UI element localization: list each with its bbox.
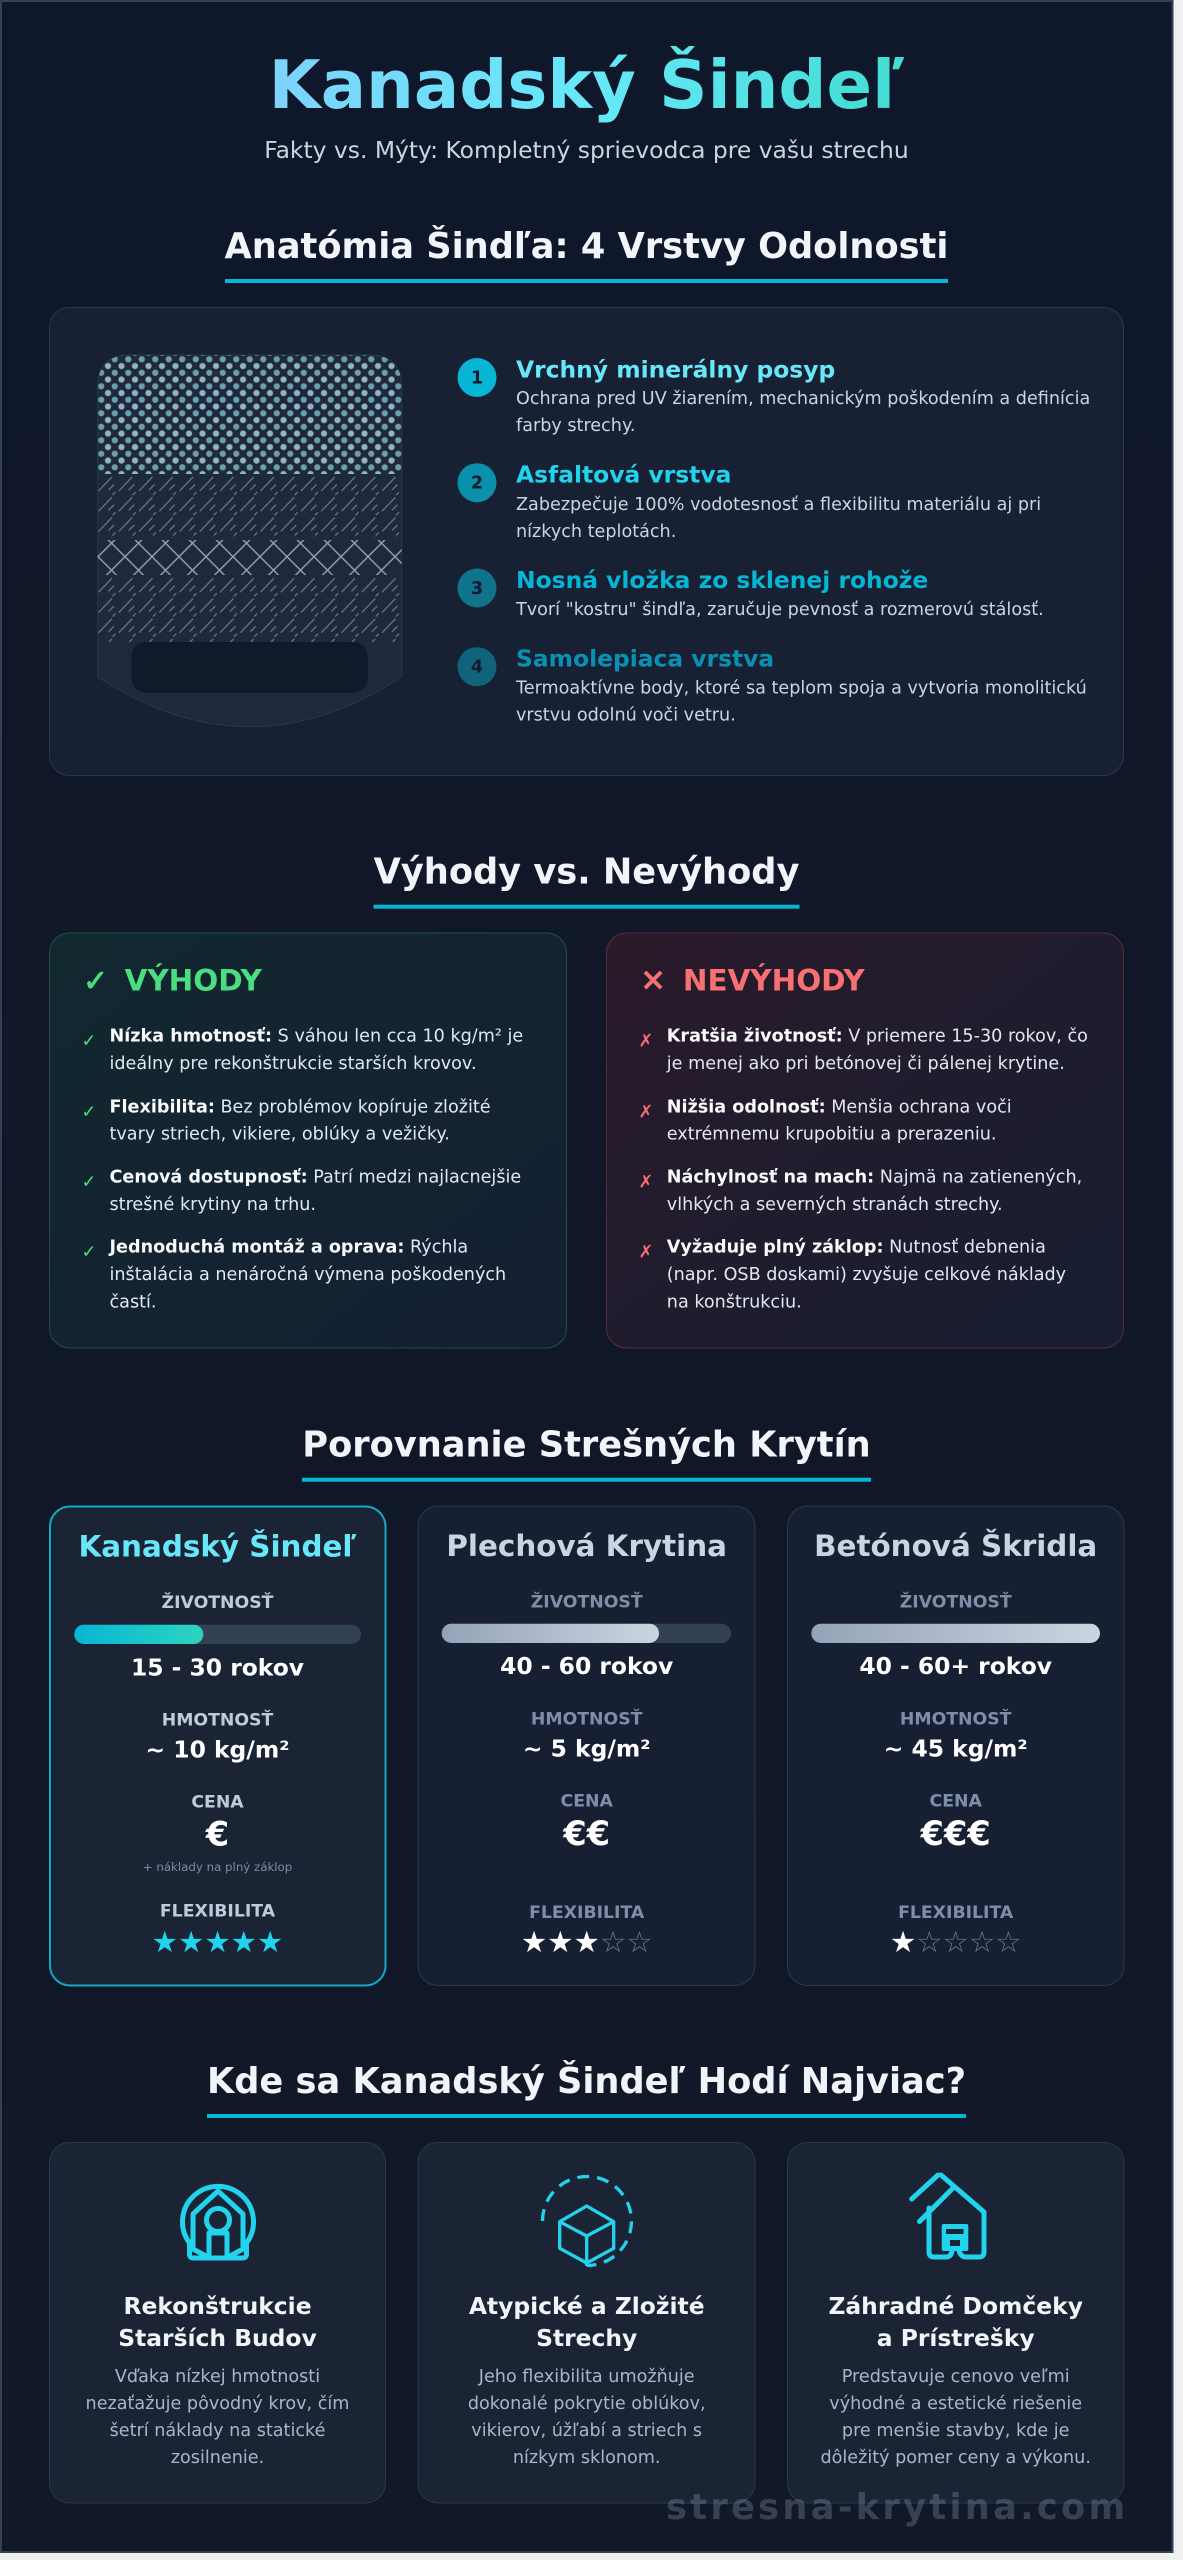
comparison card: Betónová Škridla — [788, 1506, 1124, 1986]
comparison card: Kanadský Šindeľ: FLEXIBILITA — [160, 1902, 276, 1922]
cons list: (napr. OSB doskami) zvyšuje celkové náklady — [667, 1265, 1066, 1285]
pros list: ideálny pre rekonštrukcie starších krovov. — [110, 1054, 477, 1074]
cons list: vlhkých a severných stranách strechy. — [667, 1195, 1003, 1215]
usage card: garden houses: a Prístrešky — [877, 2324, 1035, 2352]
comparison card: Plechová Krytina — [418, 1506, 755, 1986]
usage card: complex roofs: nízkym sklonom. — [513, 2448, 661, 2468]
comparison card: Kanadský Šindeľ — [50, 1506, 386, 1986]
comparison card: Kanadský Šindeľ: CENA — [191, 1792, 244, 1812]
comparison card: Kanadský Šindeľ: + náklady na plný záklop — [143, 1860, 292, 1874]
layer 2 — [458, 461, 1041, 542]
comparison card: Betónová Škridla: 40 - 60+ rokov — [859, 1652, 1052, 1680]
comparison card: Plechová Krytina: 40 - 60 rokov — [500, 1652, 673, 1680]
usage card: reconstruction — [50, 2142, 386, 2503]
pros list: ✓ — [82, 1102, 96, 1122]
layer 2: 2 — [471, 474, 483, 494]
cons list: Náchylnosť na mach: Najmä na zatienených, — [667, 1168, 1082, 1188]
layer 1: Ochrana pred UV žiarením, mechanickým poškodením a definícia — [516, 389, 1090, 409]
pros list: ✓ — [82, 1032, 96, 1052]
cons list — [638, 1027, 1088, 1312]
comparison card: Plechová Krytina: CENA — [561, 1792, 613, 1812]
comparison card: Betónová Škridla: HMOTNOSŤ — [900, 1708, 1012, 1730]
comparison card: Betónová Škridla: ★☆☆☆☆ — [890, 1925, 1022, 1959]
pros list: Flexibilita: Bez problémov kopíruje zložité — [110, 1097, 491, 1117]
usage card: garden houses: dôležitý pomer ceny a výkonu. — [820, 2448, 1091, 2468]
comparison card: Plechová Krytina: FLEXIBILITA — [529, 1903, 645, 1923]
panel: anatomy — [50, 308, 1124, 776]
layer 3: Nosná vložka zo sklenej rohože — [516, 566, 928, 594]
pros list: ✓ — [82, 1243, 96, 1263]
cons list: ✗ — [638, 1173, 653, 1193]
layer 2: nízkych teplotách. — [516, 522, 676, 542]
subtitle: Fakty vs. Mýty: Kompletný sprievodca pre vašu strechu — [264, 136, 909, 164]
icon: old building — [182, 2186, 254, 2258]
pros list: Nízka hmotnosť: S váhou len cca 10 kg/m² je — [110, 1027, 523, 1047]
cons heading: ✕ — [640, 964, 666, 999]
title: Kanadský Šindeľ — [269, 45, 905, 124]
pros heading: ✓ — [83, 964, 108, 999]
comparison card: Kanadský Šindeľ: ŽIVOTNOSŤ — [162, 1591, 274, 1613]
pros list: častí. — [110, 1292, 156, 1312]
comparison card: Kanadský Šindeľ: € — [205, 1815, 229, 1854]
usage card: complex roofs: Atypické a Zložité — [469, 2292, 705, 2320]
usage card: garden houses: Záhradné Domčeky — [828, 2292, 1083, 2320]
lifespan bar — [442, 1624, 731, 1643]
usage card: complex roofs: Strechy — [536, 2324, 637, 2352]
comparison card: Plechová Krytina: €€ — [562, 1814, 610, 1853]
layer 4: vrstvu odolnú voči vetru. — [516, 706, 736, 726]
layer 3: 3 — [471, 579, 483, 599]
pros list: Jednoduchá montáž a oprava: Rýchla — [108, 1238, 468, 1258]
pros list: strešné krytiny na trhu. — [110, 1195, 316, 1215]
layer 3 — [458, 566, 1044, 620]
cons heading: NEVÝHODY — [683, 962, 865, 998]
usage card: complex roofs: vikierov, úžľabí a striech s — [471, 2421, 702, 2441]
usage card: garden houses: pre menšie stavby, kde je — [842, 2421, 1069, 2441]
shingle layers diagram — [97, 355, 402, 727]
cons list: ✗ — [638, 1102, 653, 1122]
layer 1: Vrchný minerálny posyp — [516, 356, 835, 384]
layer 1 — [458, 356, 1090, 436]
layer 4 — [458, 645, 1087, 726]
icon: garden house — [912, 2175, 984, 2257]
usage card: reconstruction: Rekonštrukcie — [123, 2292, 312, 2320]
usage card: complex roofs — [418, 2142, 755, 2503]
comparison card: Plechová Krytina: Plechová Krytina — [446, 1529, 727, 1563]
lifespan bar — [74, 1625, 361, 1644]
heading: usage: Kde sa Kanadský Šindeľ Hodí Najviac? — [207, 2060, 966, 2102]
layer 2: Asfaltová vrstva — [516, 461, 731, 489]
layer 2: Zabezpečuje 100% vodotesnosť a flexibilitu materiálu aj pri — [516, 495, 1041, 515]
comparison card: Plechová Krytina: ★★★☆☆ — [521, 1925, 653, 1959]
pros heading: VÝHODY — [125, 962, 262, 998]
heading: pros and cons: Výhody vs. Nevýhody — [374, 852, 799, 893]
comparison card: Betónová Škridla: FLEXIBILITA — [898, 1903, 1014, 1923]
comparison card: Betónová Škridla: ~ 45 kg/m² — [884, 1735, 1028, 1763]
usage card: garden houses: výhodné a estetické riešenie — [829, 2394, 1082, 2414]
comparison card: Betónová Škridla: €€€ — [920, 1814, 991, 1853]
layer 4: 4 — [471, 658, 483, 678]
panel: pros — [50, 933, 566, 1348]
icon: cube in dashed circle — [542, 2176, 632, 2266]
lifespan bar — [811, 1624, 1100, 1643]
layer 3: Tvorí "kostru" šindľa, zaručuje pevnosť a rozmerovú stálosť. — [515, 600, 1044, 620]
panel: cons — [606, 933, 1124, 1348]
heading: comparison: Porovnanie Strešných Krytín — [302, 1425, 871, 1466]
comparison card: Plechová Krytina: ŽIVOTNOSŤ — [531, 1590, 643, 1612]
layer 4: Termoaktívne body, ktoré sa teplom spoja a vytvoria monolitickú — [515, 678, 1087, 698]
usage card: reconstruction: šetrí náklady na statické — [110, 2421, 325, 2441]
layer 1: 1 — [471, 368, 483, 388]
pros list: inštalácia a nenáročná výmena poškodených — [110, 1265, 506, 1285]
comparison card: Kanadský Šindeľ: 15 - 30 rokov — [131, 1653, 304, 1681]
pros list: Cenová dostupnosť: Patrí medzi najlacnejšie — [110, 1168, 521, 1188]
cons list: Vyžaduje plný záklop: Nutnosť debnenia — [667, 1238, 1046, 1258]
usage card: complex roofs: dokonalé pokrytie oblúkov, — [468, 2394, 706, 2414]
cons list: ✗ — [638, 1243, 653, 1263]
cons list: je menej ako pri betónovej či pálenej krytine. — [666, 1054, 1065, 1074]
usage card: garden houses: Predstavuje cenovo veľmi — [842, 2367, 1070, 2387]
comparison card: Kanadský Šindeľ: Kanadský Šindeľ — [78, 1528, 357, 1564]
comparison card: Betónová Škridla: Betónová Škridla — [814, 1527, 1097, 1563]
heading: anatomy: Anatómia Šindľa: 4 Vrstvy Odolnosti — [225, 225, 948, 267]
comparison card: Betónová Škridla: CENA — [930, 1792, 982, 1812]
pros list: tvary striech, vikiere, oblúky a vežičky. — [110, 1125, 450, 1145]
usage card: reconstruction: Starších Budov — [118, 2324, 317, 2352]
usage card: reconstruction: Vďaka nízkej hmotnosti — [115, 2367, 320, 2387]
comparison card: Kanadský Šindeľ: ~ 10 kg/m² — [146, 1736, 289, 1764]
layer 1: farby strechy. — [516, 416, 635, 436]
comparison card: Plechová Krytina: HMOTNOSŤ — [531, 1708, 643, 1730]
cons list: na konštrukciu. — [667, 1292, 802, 1312]
comparison card: Plechová Krytina: ~ 5 kg/m² — [523, 1735, 651, 1763]
cons list: extrémnemu krupobitiu a prerazeniu. — [667, 1125, 996, 1145]
usage card: reconstruction: nezaťažuje pôvodný krov, čím — [86, 2394, 349, 2414]
layer 4: Samolepiaca vrstva — [516, 645, 774, 673]
comparison card: Betónová Škridla: ŽIVOTNOSŤ — [900, 1590, 1012, 1612]
usage card: reconstruction: zosilnenie. — [171, 2448, 264, 2468]
cons list: Nižšia odolnosť: Menšia ochrana voči — [667, 1097, 1012, 1117]
cons list: ✗ — [638, 1032, 653, 1052]
pros list: ✓ — [82, 1173, 96, 1193]
usage card: complex roofs: Jeho flexibilita umožňuje — [478, 2367, 695, 2387]
pros list — [82, 1027, 523, 1312]
header — [264, 45, 909, 164]
watermark: stresna-krytina.com — [666, 2487, 1128, 2528]
cons list: Kratšia životnosť: V priemere 15-30 rokov, čo — [667, 1027, 1088, 1047]
usage card: garden houses — [788, 2142, 1124, 2503]
comparison card: Kanadský Šindeľ: HMOTNOSŤ — [162, 1709, 273, 1731]
comparison card: Kanadský Šindeľ: ★★★★★ — [152, 1925, 283, 1959]
pros heading — [83, 962, 262, 999]
